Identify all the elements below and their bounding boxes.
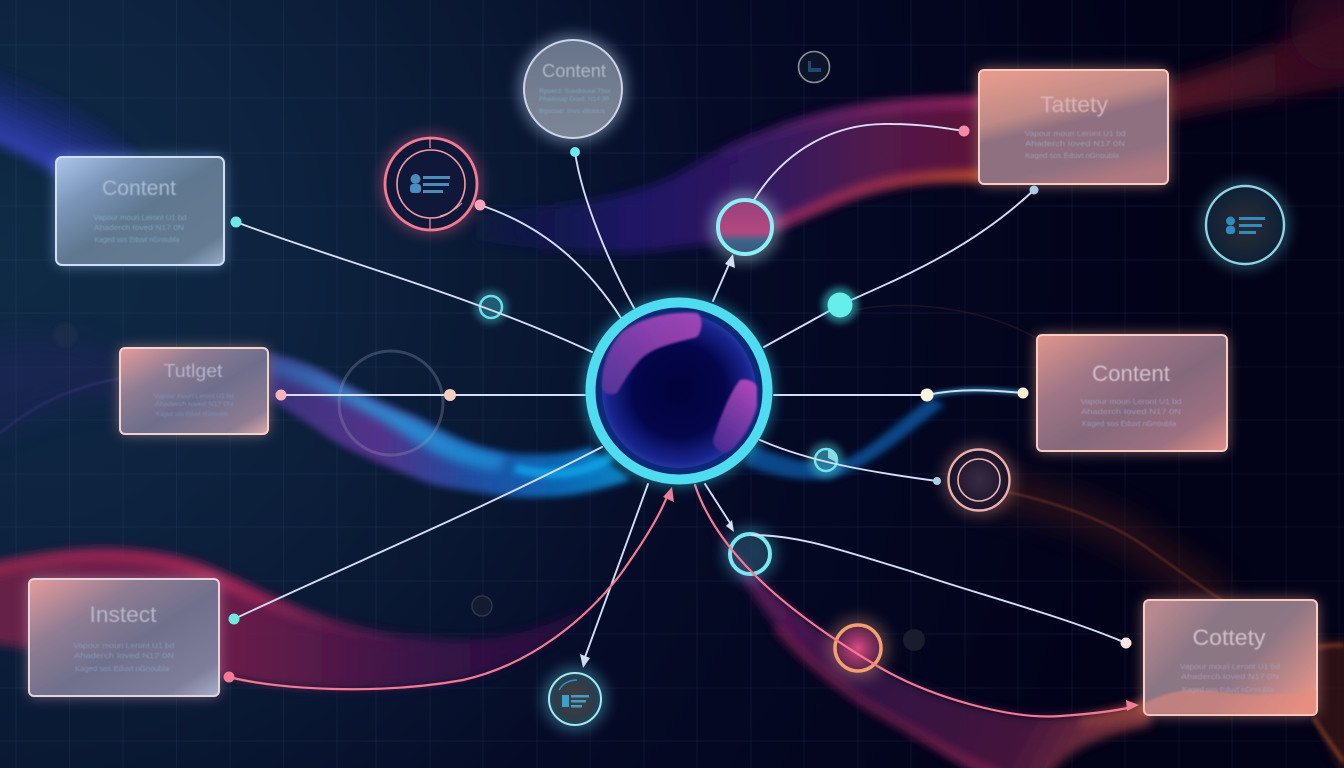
node: small ring left [474, 290, 508, 324]
ribbon: right orange glow [855, 305, 1344, 768]
card: Tattety [979, 70, 1168, 184]
central hub [585, 297, 773, 485]
circle card: Content top [519, 35, 627, 143]
card: Tutlget: Tutlget [164, 361, 222, 381]
connector end dots [224, 126, 1132, 682]
arrowheads [580, 254, 1139, 711]
line: Instect card to hub [234, 447, 602, 619]
line: hub to lower right ring [760, 440, 937, 481]
line: hub to large ring [713, 262, 730, 301]
card: Content left: Ahaderch Ioved N17 0N [94, 225, 184, 232]
card: Tattety: Kaged sos Eduvt nGnoubla [1025, 153, 1119, 160]
card: Instect: Instect [90, 602, 156, 627]
icon: cyan ring with list right [1201, 181, 1289, 269]
node: large faint ring left [339, 351, 443, 455]
card: Content right: Ahaderch Ioved N17 0N [1081, 409, 1181, 416]
line: hub to Content right [774, 390, 1023, 395]
line: hub to Cottety [695, 485, 1132, 716]
card: Instect: Vapour mouri Leront U1 bd [74, 643, 175, 650]
line: hub to Tattety card [764, 190, 1034, 347]
line: ring to Cottety card [752, 535, 1126, 643]
card: Content left: Vapour mouri Leront U1 bd [94, 215, 187, 222]
card: Tattety: Vapour mouri Leront U1 bd [1024, 131, 1126, 138]
line: ring to Tattety card [754, 124, 964, 200]
line: top circle to hub [575, 152, 634, 308]
node: large ring right of top [710, 192, 780, 262]
card: Cottety: Kaged sos Eduvt nGnoubla [1182, 687, 1274, 694]
card: Cottety: Vapour mouri Leront U1 bd [1180, 664, 1280, 671]
line: hub to cyan ring [705, 484, 732, 526]
card: Tutlget: Kaged sos Eduvt nGnoubla [156, 412, 229, 418]
node: double ring lower right [943, 444, 1015, 516]
ribbon: bottom-left pink [0, 549, 615, 689]
card: Content left: Content [102, 177, 176, 200]
card: Instect: Kaged sos Eduvt nGnoubla [75, 666, 169, 673]
icon: pink ring with list [381, 134, 481, 234]
card: Tattety: Ahaderch Ioved N17 0N [1025, 141, 1125, 148]
pink arrow curves [229, 485, 1132, 716]
node: teal dot upper right [822, 287, 858, 323]
card: Cottety: Cottety [1192, 625, 1266, 650]
line: hub to bottom icon [584, 484, 648, 660]
highlight: lower right [713, 379, 757, 453]
icon: small dim ring top [798, 52, 830, 82]
node: orange ring bottom [827, 617, 889, 679]
node: dim dots [53, 323, 925, 651]
card: Tutlget: Ahaderch Ioved N17 0N [155, 402, 233, 408]
ribbon: middle-left purple and cyan wave [269, 353, 631, 497]
ribbon: far-left faint purple [0, 338, 125, 445]
card: Tutlget [120, 348, 268, 434]
node: small ring right [808, 442, 844, 478]
icon: bottom small ring with list [543, 667, 607, 731]
card: Tutlget: Vapour mouri Leront U1 bd [154, 394, 234, 400]
line: Tutlget card to hub [281, 394, 585, 396]
node: cyan ring bottom [723, 527, 777, 581]
ribbon: middle-right cyan wave [745, 390, 1024, 479]
card: Content left [56, 157, 224, 265]
highlight: upper left [602, 313, 702, 394]
card: Content right: Vapour mouri Leront U1 bd [1080, 399, 1182, 406]
card: Content right [1037, 335, 1227, 451]
circle card: Content top: Content [542, 61, 606, 81]
card: Cottety: Ahaderch Ioved N17 0N [1181, 674, 1279, 681]
ribbon: top pink band [476, 0, 1344, 252]
card: Instect [29, 579, 219, 696]
circle card: Content top: Bgsose: Invs diloous [539, 109, 605, 115]
ribbon: top-left blue [0, 66, 139, 217]
line: card Content left to hub [236, 222, 592, 352]
card: Content left: Kaged sos Eduvt nGnoubla [94, 237, 180, 244]
card: Instect: Ahaderch Ioved N17 0N [74, 653, 174, 660]
card: Cottety [1144, 600, 1317, 715]
ribbon: bottom-right magenta [700, 490, 1150, 768]
card: Tattety: Tattety [1040, 92, 1108, 117]
circle card: Content top: Phadosap Duvd: N14 JP [539, 97, 609, 103]
line: pink icon to hub [480, 205, 621, 318]
connector lines [234, 124, 1126, 660]
circle card: Content top: Rpoerd: Suvdlouse Thur [539, 89, 611, 95]
card: Content right: Content [1092, 361, 1170, 386]
card: Content right: Kaged sos Eduvt nGnoubla [1082, 421, 1176, 428]
line: Instect to hub [229, 492, 669, 689]
